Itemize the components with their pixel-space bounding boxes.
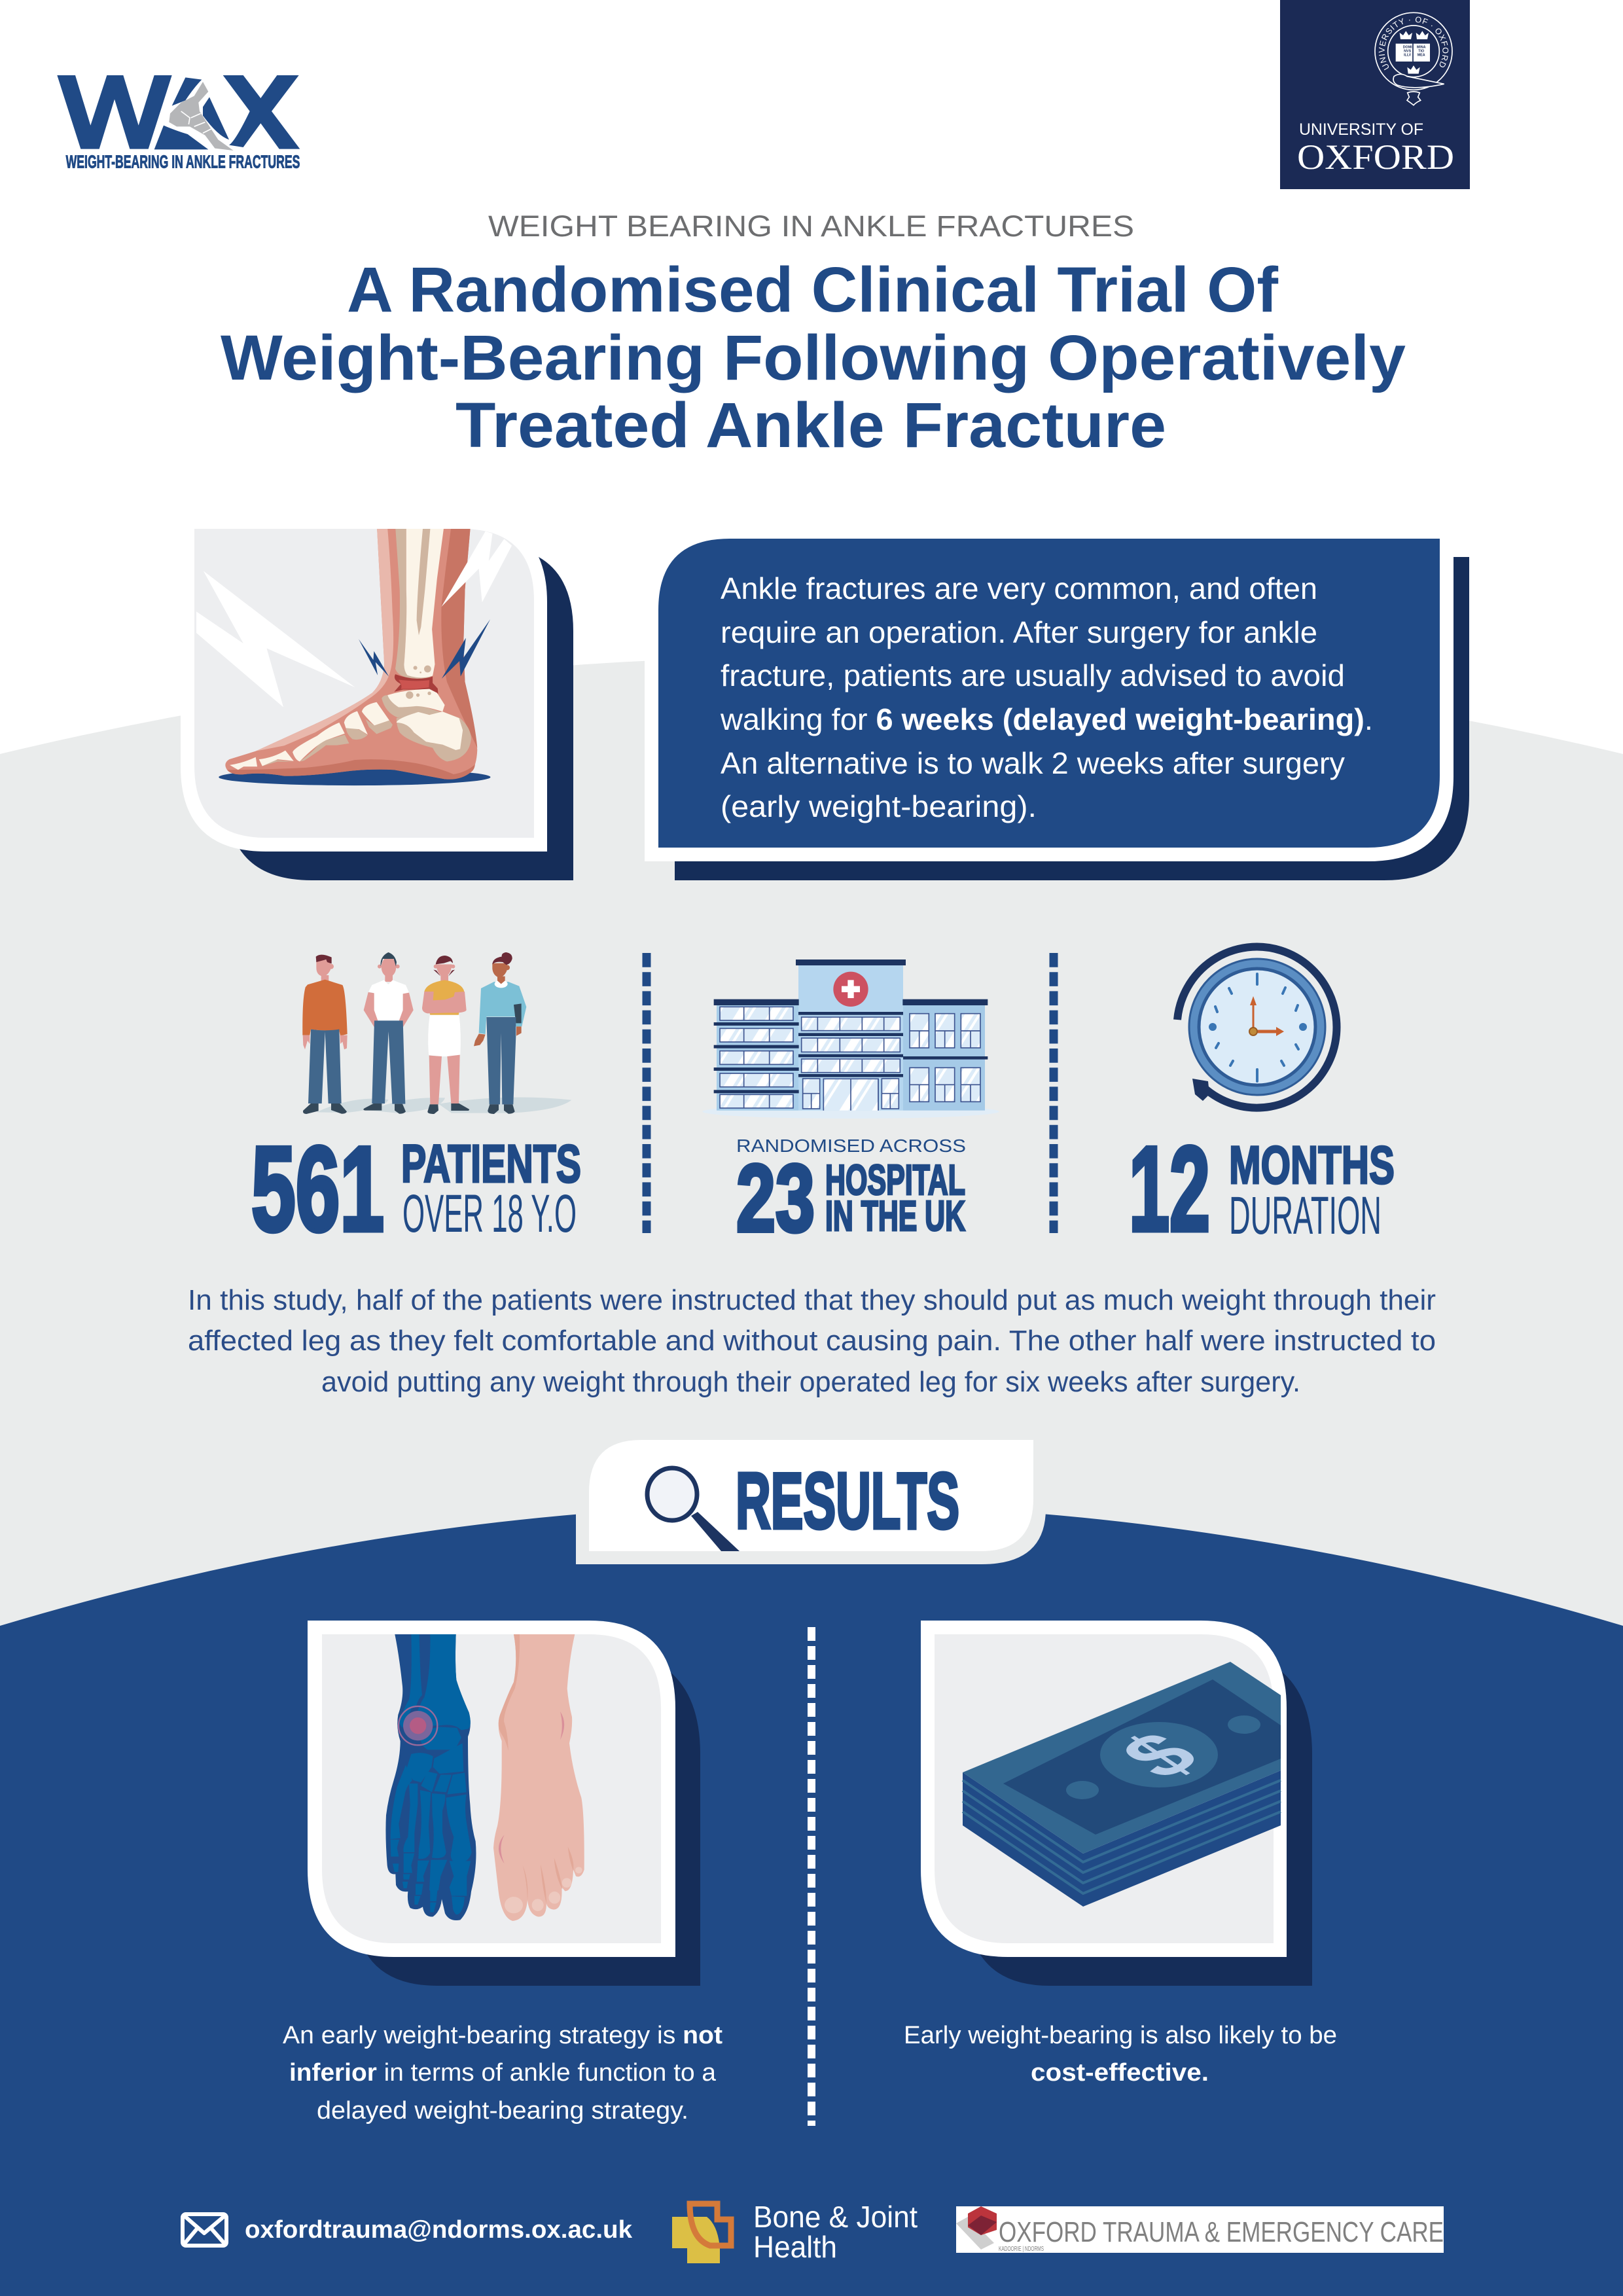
icon: envelope [183, 2214, 226, 2246]
logo: University of Oxford: UNIVERSITY OF [1299, 120, 1423, 139]
text block: walking for 6 weeks (delayed weight-bearing) . [720, 702, 1373, 736]
text block: ankle function result: inferior in terms of ankle function to a [289, 2059, 717, 2087]
logo: Bone & Joint Health: Health [753, 2230, 837, 2264]
icon: Oxford crest: UNIVERSITY · OF · OXFORD [1378, 17, 1449, 71]
logo: University of Oxford [1280, 0, 1470, 189]
text block: require an operation. After surgery for ankle [721, 615, 1317, 649]
title [221, 254, 1406, 461]
icon: Oxford crest: MINA [1417, 45, 1426, 49]
stat: hospitals: 23 [736, 1145, 815, 1251]
windows [720, 1007, 980, 1111]
panel: money illustration [921, 1621, 1312, 1986]
text block [720, 571, 1373, 823]
text block: ankle function result: An early weight-bearing strategy is not [283, 2022, 722, 2049]
stat: patients: OVER 18 Y.O [402, 1184, 577, 1244]
text block: study description: affected leg as they felt comfortable and without causing pain. The other half were instructed to [188, 1325, 1436, 1357]
logo: University of Oxford: OXFORD [1297, 137, 1454, 177]
panel: introduction text [645, 539, 1469, 880]
icon: Oxford crest: NVS [1404, 49, 1412, 53]
stat: patients: PATIENTS [401, 1134, 581, 1194]
logo: WAX [57, 75, 300, 172]
text block: study description: In this study, half of the patients were instructed that they should put as much weight through their [188, 1284, 1436, 1316]
icon: hospital [702, 960, 999, 1119]
logo: Oxford Trauma & Emergency Care: KADOORIE | NDORMS [999, 2246, 1044, 2253]
text block: study description [188, 1284, 1436, 1398]
title: Treated Ankle Fracture [455, 389, 1166, 461]
stat: hospitals: RANDOMISED ACROSS [736, 1136, 966, 1156]
icon: Oxford crest: TIO [1418, 49, 1424, 53]
heading: results [576, 1440, 1046, 1564]
contact email: oxfordtrauma@ndorms.ox.ac.uk [245, 2216, 633, 2244]
person 2 [363, 952, 414, 1114]
text block: ankle function result: delayed weight-bearing strategy. [317, 2097, 688, 2125]
logo: Oxford Trauma & Emergency Care: OXFORD TRAUMA & EMERGENCY CARE [999, 2216, 1444, 2248]
icon: red cross [833, 972, 868, 1007]
logo: Bone & Joint Health [672, 2200, 918, 2264]
stat: hospitals: IN THE UK [825, 1192, 965, 1240]
icon: healthy foot [493, 1634, 584, 1921]
divider [1050, 953, 1058, 1233]
icon: clock [1177, 947, 1336, 1108]
icon: stack of banknotes [963, 1662, 1281, 1907]
panel: feet illustration [308, 1621, 700, 1986]
text block: cost result: cost-effective. [1031, 2059, 1209, 2087]
logo: WAX: WEIGHT-BEARING IN ANKLE FRACTURES [66, 152, 300, 172]
person 4 [474, 952, 526, 1114]
text block: Ankle fractures are very common, and often [721, 571, 1317, 605]
stat: duration [1129, 1121, 1395, 1256]
text block: study description: avoid putting any weight through their operated leg for six weeks after surgery. [321, 1366, 1300, 1398]
stat: patients: 561 [251, 1121, 384, 1256]
title: A Randomised Clinical Trial Of [347, 254, 1279, 325]
divider [643, 953, 651, 1233]
text block: cost result: Early weight-bearing is also likely to be [904, 2022, 1337, 2049]
icon: x-ray foot [385, 1634, 476, 1920]
heading: results: RESULTS [736, 1456, 959, 1545]
stat: hospitals: HOSPITAL [825, 1156, 965, 1204]
stat: patients [251, 1121, 581, 1256]
title: Weight-Bearing Following Operatively [221, 322, 1406, 393]
stat: duration: MONTHS [1229, 1136, 1395, 1195]
divider [808, 1627, 815, 2126]
panel: ankle fracture illustration [181, 517, 573, 880]
icon: Oxford crest: ILLV [1404, 53, 1412, 57]
icon: Oxford crest: MEA [1418, 53, 1425, 57]
stat: duration: DURATION [1229, 1186, 1382, 1246]
icon: ankle and foot anatomy [196, 529, 512, 785]
icon: Oxford crest [1374, 12, 1453, 106]
icon: magnifying glass [647, 1468, 740, 1551]
logo: Oxford Trauma & Emergency Care [956, 2206, 1444, 2253]
subtitle: WEIGHT BEARING IN ANKLE FRACTURES [488, 209, 1134, 243]
icon: stack of banknotes: $ [1101, 1719, 1218, 1791]
person 1 [302, 955, 348, 1114]
icon: four patients [302, 952, 571, 1114]
text block: ankle function result [283, 2022, 722, 2125]
text block: cost result [904, 2022, 1337, 2087]
person 3 [422, 956, 469, 1114]
stat: hospitals [736, 1136, 966, 1251]
text block: An alternative is to walk 2 weeks after surgery [721, 746, 1345, 780]
stat: duration: 12 [1129, 1121, 1210, 1256]
text block: (early weight-bearing). [721, 789, 1037, 823]
icon: Oxford crest: DOMI [1403, 45, 1412, 49]
logo: Bone & Joint Health: Bone & Joint [753, 2200, 918, 2234]
text block: fracture, patients are usually advised to avoid [721, 658, 1345, 692]
